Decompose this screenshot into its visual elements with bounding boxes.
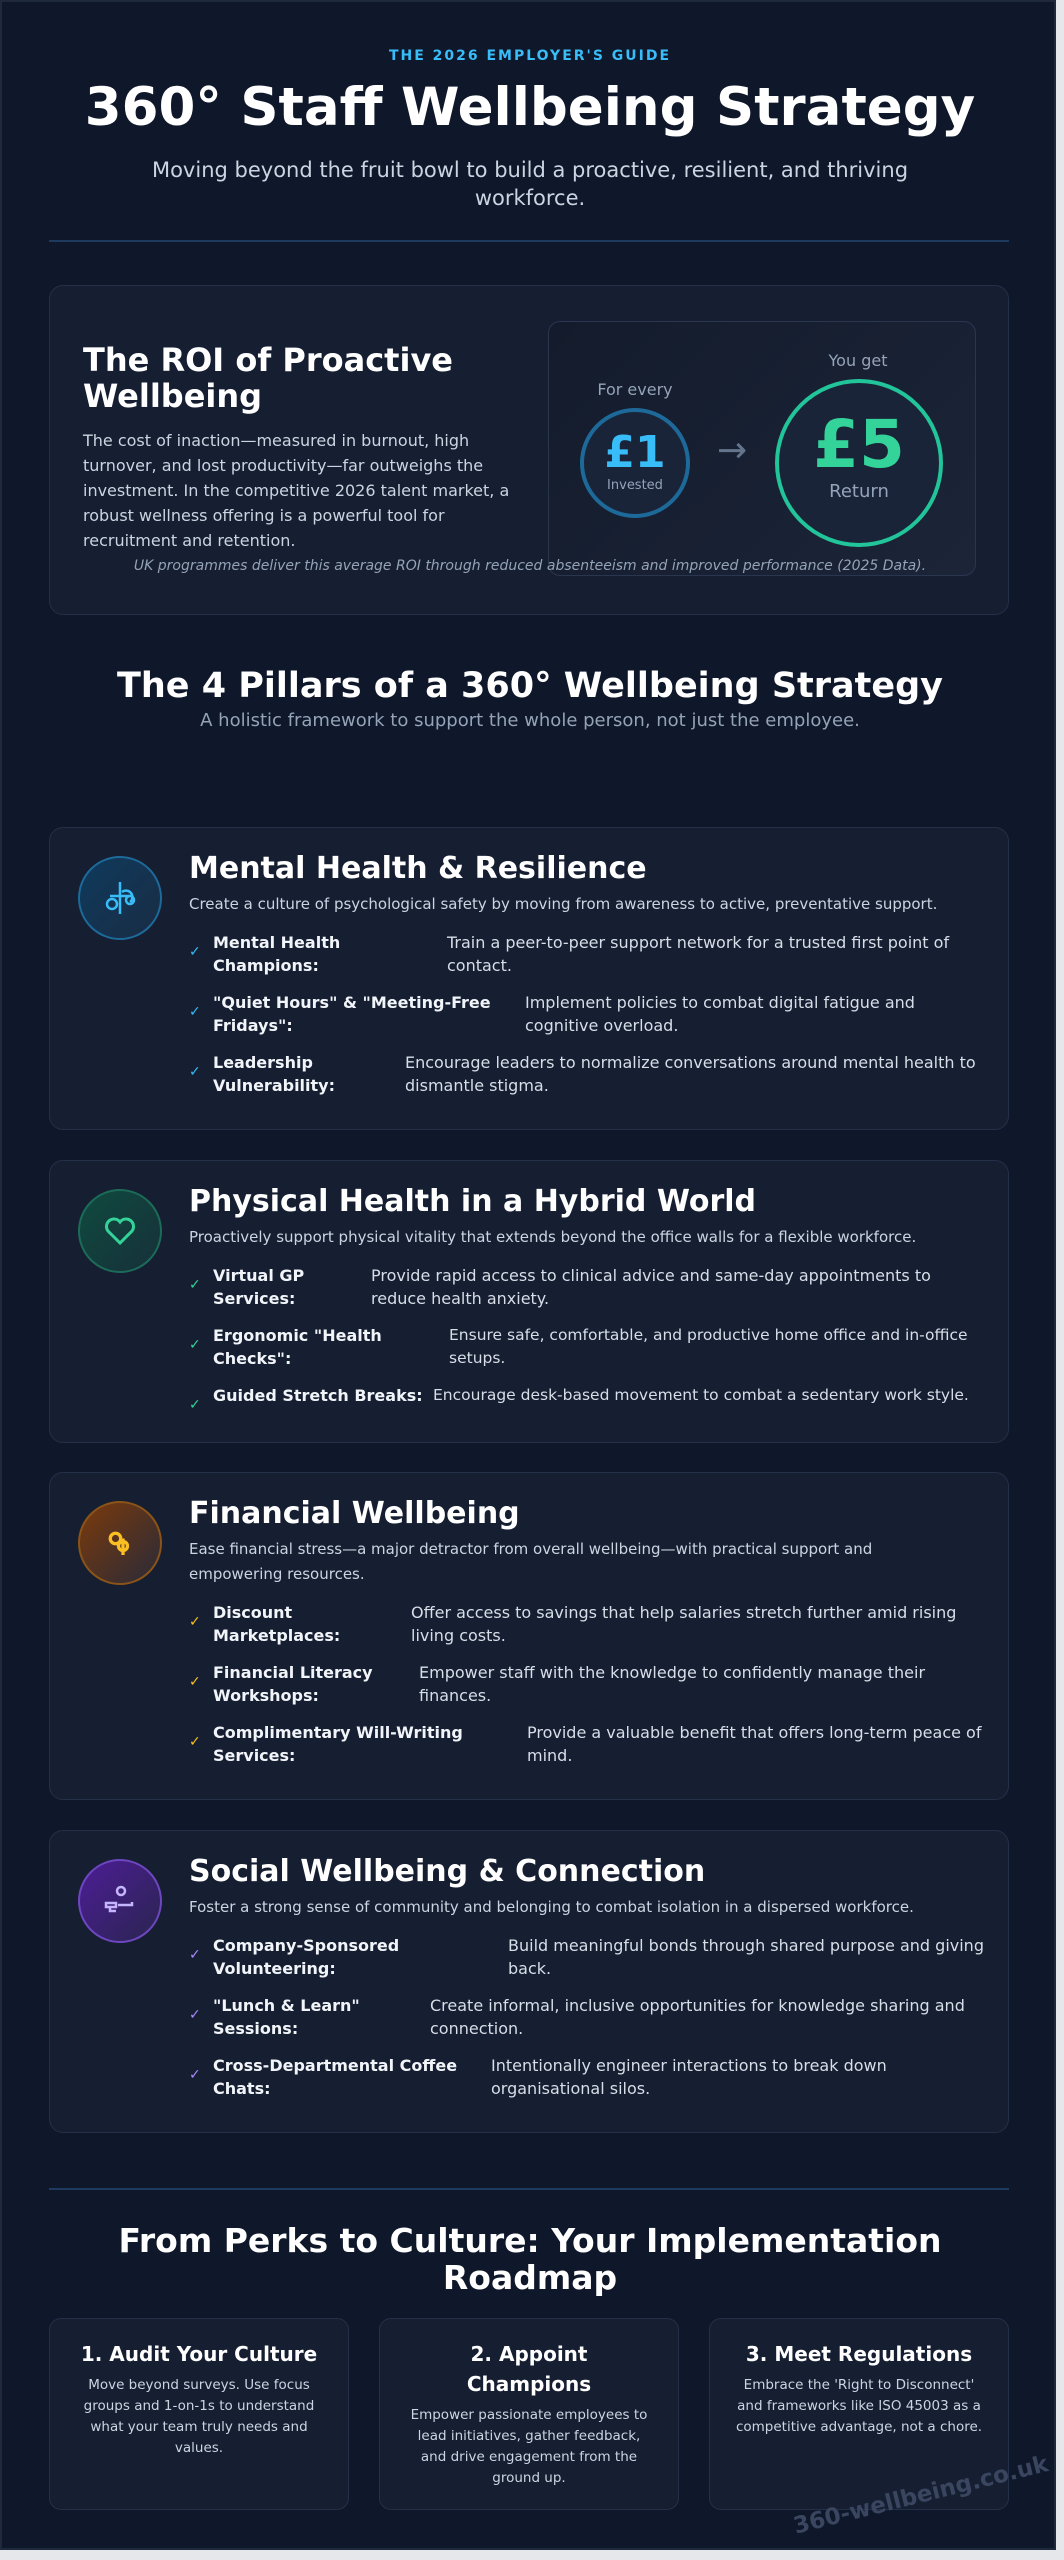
- roadmap step 2: 2. Appoint Champions: [467, 2342, 591, 2396]
- panel: physical health: Ensure safe, comfortable, and productive home office and in-office setups.: [449, 1326, 968, 1367]
- icon: coins: [78, 1501, 162, 1585]
- panel: mental health: [49, 827, 1009, 1130]
- panel: mental health: "Quiet Hours" & "Meeting-Free Fridays":: [213, 993, 491, 1035]
- circle: £1: £1: [604, 427, 666, 478]
- panel: physical health: Ergonomic "Health Checks":: [213, 1326, 382, 1368]
- panel: mental health: Create a culture of psychological safety by moving from awareness to active, preventative support.: [189, 895, 937, 913]
- panel: mental health: ✓: [189, 1064, 201, 1080]
- ROI graphic: [548, 321, 976, 576]
- panel: mental health: Implement policies to combat digital fatigue and cognitive overload.: [525, 993, 915, 1035]
- watermark: 360-wellbeing.co.uk: [791, 2451, 1051, 2540]
- circle: £1: Invested: [607, 478, 663, 493]
- panel: financial: Financial Literacy Workshops:: [213, 1663, 373, 1705]
- panel: financial: Complimentary Will-Writing Services:: [213, 1723, 463, 1765]
- panel: financial: Discount Marketplaces:: [213, 1603, 340, 1645]
- panel: financial: ✓: [189, 1614, 201, 1630]
- panel: physical health: ✓: [189, 1397, 201, 1413]
- icon: mental: [78, 856, 162, 940]
- panel: physical health: Proactively support physical vitality that extends beyond the office walls for a flexible workforce.: [189, 1228, 916, 1246]
- panel: mental health: Leadership Vulnerability:: [213, 1053, 335, 1095]
- panel: mental health: ✓: [189, 944, 201, 960]
- panel: physical health: [49, 1160, 1009, 1443]
- panel: financial: [49, 1472, 1009, 1800]
- panel: financial: Offer access to savings that help salaries stretch further amid rising living costs.: [411, 1603, 956, 1645]
- roadmap step 1: Move beyond surveys. Use focus groups and 1-on-1s to understand what your team truly needs and values.: [84, 2377, 314, 2456]
- roadmap heading: From Perks to Culture: Your Implementation Roadmap: [118, 2221, 942, 2297]
- title: mental: Mental Health & Resilience: [189, 851, 647, 886]
- title: financial: Financial Wellbeing: [189, 1496, 520, 1531]
- panel: physical health: Encourage desk-based movement to combat a sedentary work style.: [433, 1386, 969, 1404]
- circle: £1: [580, 408, 690, 518]
- roadmap step 1: 1. Audit Your Culture: [81, 2342, 317, 2366]
- ROI text: The cost of inaction—measured in burnout, high turnover, and lost productivity—far outweighs the investment. In the competitive 2026 talent market, a robust wellness offering is a powerful tool for recruitment and retention.: [83, 431, 509, 550]
- panel: financial: ✓: [189, 1734, 201, 1750]
- circle: £5: [775, 379, 943, 547]
- pillars subheading: A holistic framework to support the whole person, not just the employee.: [200, 710, 860, 731]
- panel: social: ✓: [189, 2067, 201, 2083]
- panel: social: ✓: [189, 2007, 201, 2023]
- panel: social: [49, 1830, 1009, 2133]
- subtitle: Moving beyond the fruit bowl to build a proactive, resilient, and thriving workforce.: [152, 158, 908, 210]
- title: physical: Physical Health in a Hybrid World: [189, 1184, 756, 1219]
- panel: social: Company-Sponsored Volunteering:: [213, 1936, 399, 1978]
- ROI footnote: UK programmes deliver this average ROI through reduced absenteeism and improved performance (2025 Data).: [134, 558, 926, 574]
- icon: heart: [78, 1189, 162, 1273]
- panel: social: "Lunch & Learn" Sessions:: [213, 1996, 360, 2038]
- panel: financial: ✓: [189, 1674, 201, 1690]
- panel: financial: Ease financial stress—a major detractor from overall wellbeing—with practical support and empowering resources.: [189, 1540, 872, 1583]
- roadmap step 2: [379, 2318, 679, 2510]
- icon: people: [78, 1859, 162, 1943]
- panel: social: Build meaningful bonds through shared purpose and giving back.: [508, 1936, 984, 1978]
- panel: physical health: Virtual GP Services:: [213, 1266, 304, 1308]
- panel: social: Foster a strong sense of community and belonging to combat isolation in a dispersed workforce.: [189, 1898, 914, 1916]
- pillars heading: The 4 Pillars of a 360° Wellbeing Strategy: [117, 666, 943, 706]
- kicker: THE 2026 EMPLOYER'S GUIDE: [389, 48, 671, 64]
- panel: social: Create informal, inclusive opportunities for knowledge sharing and connection.: [430, 1996, 965, 2038]
- panel: mental health: ✓: [189, 1004, 201, 1020]
- circle: £5: £5: [813, 406, 905, 483]
- arrow: →: [717, 430, 747, 471]
- title: 360° Staff Wellbeing Strategy: [85, 77, 975, 138]
- circle: £5: Return: [829, 481, 889, 502]
- title: social: Social Wellbeing & Connection: [189, 1854, 705, 1889]
- panel: mental health: Encourage leaders to normalize conversations around mental health to dismantle stigma.: [405, 1053, 976, 1095]
- ROI heading: The ROI of Proactive Wellbeing: [83, 341, 453, 415]
- panel: mental health: Mental Health Champions:: [213, 933, 340, 975]
- panel: mental health: Train a peer-to-peer support network for a trusted first point of contact.: [447, 933, 949, 975]
- panel: financial: Empower staff with the knowledge to confidently manage their finances.: [419, 1663, 925, 1705]
- panel: ROI: [49, 285, 1009, 615]
- roadmap step 3: 3. Meet Regulations: [746, 2342, 972, 2366]
- label: you get: You get: [829, 351, 887, 370]
- panel: physical health: Guided Stretch Breaks:: [213, 1386, 423, 1405]
- panel: physical health: Provide rapid access to clinical advice and same-day appointments to reduce health anxiety.: [371, 1266, 931, 1308]
- roadmap step 2: Empower passionate employees to lead initiatives, gather feedback, and drive engagement from the ground up.: [411, 2407, 647, 2486]
- roadmap step 3: [709, 2318, 1009, 2510]
- panel: social: Intentionally engineer interactions to break down organisational silos.: [491, 2056, 887, 2098]
- label: for every: For every: [597, 380, 673, 399]
- roadmap step 3: Embrace the 'Right to Disconnect' and frameworks like ISO 45003 as a competitive advantage, not a chore.: [736, 2377, 982, 2435]
- panel: physical health: ✓: [189, 1277, 201, 1293]
- panel: social: ✓: [189, 1947, 201, 1963]
- panel: financial: Provide a valuable benefit that offers long-term peace of mind.: [527, 1723, 981, 1765]
- panel: physical health: ✓: [189, 1337, 201, 1353]
- roadmap step 1: [49, 2318, 349, 2510]
- panel: social: Cross-Departmental Coffee Chats:: [213, 2056, 457, 2098]
